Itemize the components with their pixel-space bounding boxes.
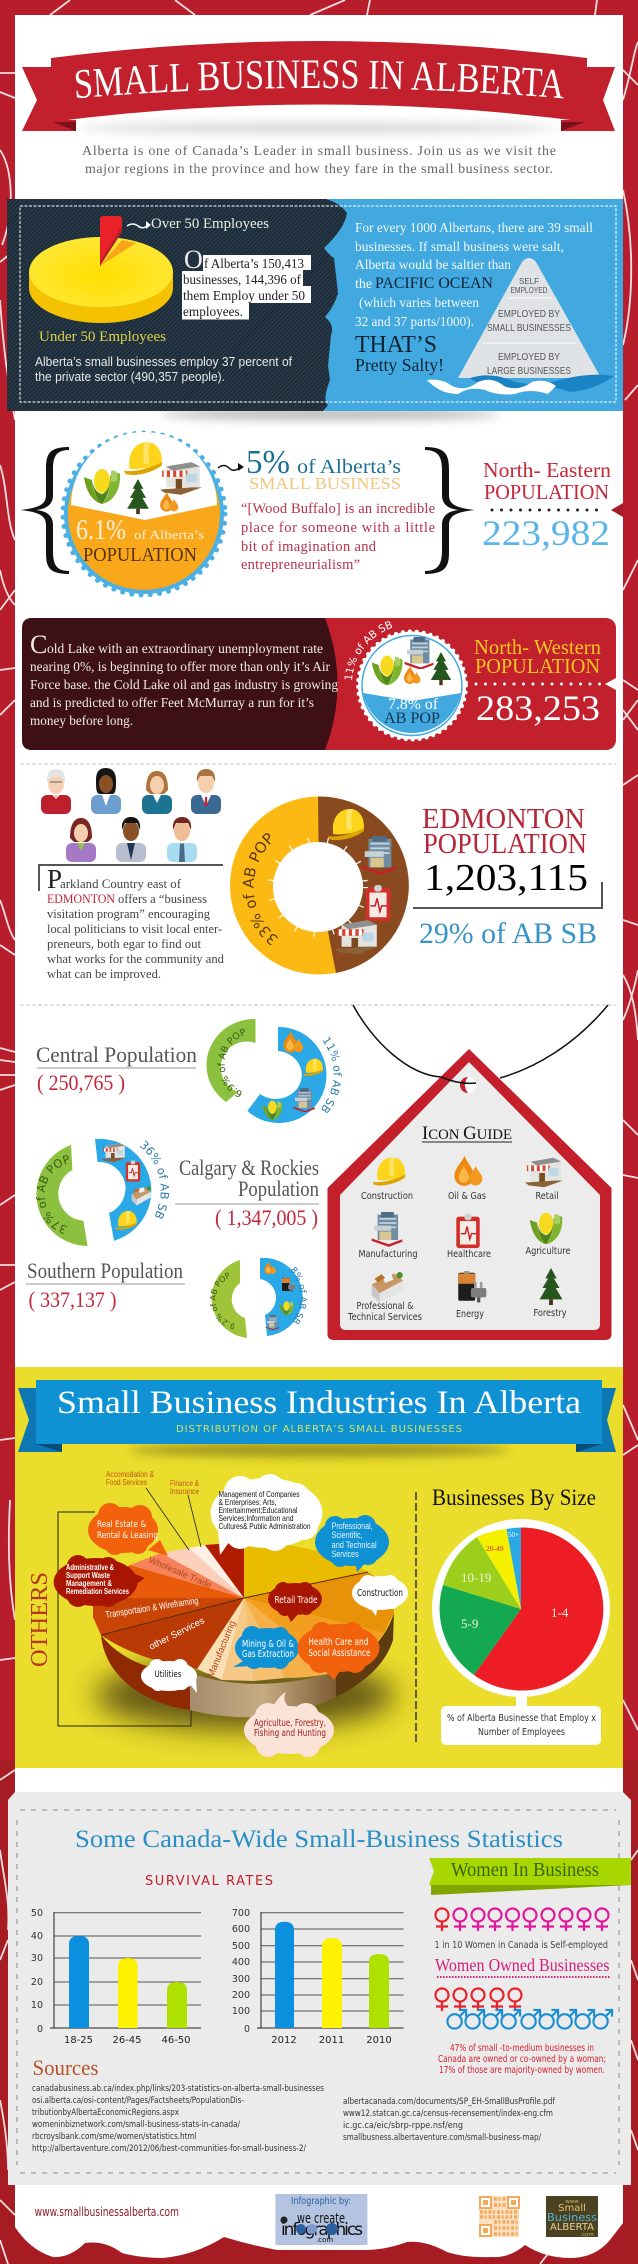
pie: businesses by size <box>432 1519 610 1697</box>
callout: businesses under 50: f Alberta’s 150,413 <box>204 256 304 271</box>
icon: factory <box>266 1315 279 1330</box>
cloud: professional <box>315 1515 389 1572</box>
text: ownership stats: 47% of small -to-medium businesses in <box>450 2043 594 2054</box>
donut: central: 6.9% of AB POP <box>217 1028 245 1097</box>
icon labels: Oil & Gas <box>448 1191 486 1202</box>
bar chart: survival by age: 18-25 <box>64 2035 93 2046</box>
panel: calgary and rockies <box>36 1138 319 1246</box>
sources: rbcroyslbank.com/sme/women/statistics.html <box>32 2132 196 2142</box>
cloud: agriculture <box>244 1692 334 1757</box>
sources: Sources <box>32 2055 98 2080</box>
sources: osi.alberta.ca/osi-content/Pages/Factsheets/PopulationDis- <box>32 2096 244 2106</box>
icon: tree <box>431 652 451 685</box>
sources: http://albertaventure.com/2012/06/best-communities-for-small-business-2/ <box>32 2144 307 2154</box>
cloud: administrative: Management & <box>66 1579 112 1588</box>
text: pacific ocean comparison: businesses. If small business were salt, <box>355 240 564 255</box>
title: SMALL BUSINESS IN ALBERTA <box>76 60 564 98</box>
people group <box>41 768 221 862</box>
icon: factory <box>293 1088 315 1113</box>
footer <box>35 2194 598 2245</box>
pie: industries <box>93 1542 395 1730</box>
sources: ic.gc.ca/eic/sbrp-rppe.nsf/eng <box>343 2121 463 2131</box>
sources: canadabusiness.ab.ca/index.php/links/203-statistics-on-alberta-small-businesses <box>32 2084 324 2094</box>
icon: forestry <box>540 1268 562 1305</box>
text: cold lake: old Lake with an extraordinary unemployment rate <box>47 641 323 656</box>
stat: 5 percent of small business: of Alberta’s <box>297 456 401 478</box>
leader lines <box>146 1488 201 1550</box>
cloud: mining: Mining & Oil & <box>242 1639 294 1650</box>
icon: hard hat <box>124 442 162 475</box>
bar chart: survival by age: 20 <box>31 1977 43 1988</box>
text: cold lake: and is predicted to offer Feet McMurray a run for it’s <box>30 695 314 710</box>
qr code <box>479 2196 519 2237</box>
icon: tree <box>127 479 149 514</box>
icon: professional <box>132 1186 151 1205</box>
text: cold lake: Force base. the Cold Lake oil and gas industry is growing <box>30 677 338 692</box>
bar chart: survival by year: 100 <box>232 2006 250 2017</box>
bar chart: survival by age <box>31 1908 201 2046</box>
badge: north-western share: 11% of AB SB <box>344 621 392 680</box>
text: pacific ocean comparison: the <box>355 277 372 292</box>
credit box <box>275 2194 367 2245</box>
cloud: retail trade: Retail Trade <box>274 1595 318 1606</box>
donut: southern: 9.2% of AB POP <box>210 1272 235 1330</box>
text: cold lake: money before long. <box>30 713 133 728</box>
credit box: .com <box>316 2236 333 2244</box>
pie: businesses by size: 50+ <box>508 1531 519 1539</box>
banner: women in business <box>429 1858 631 1895</box>
pie: businesses by size: 10-19 <box>461 1570 491 1585</box>
bar chart: survival by age: 40 <box>31 1931 43 1942</box>
cloud: construction <box>352 1575 408 1616</box>
cloud: construction: Construction <box>357 1588 403 1599</box>
stat: 5 percent of small business: SMALL BUSINESS <box>249 474 401 493</box>
cloud: professional: and Technical <box>332 1540 377 1550</box>
cloud: professional: Professional, <box>332 1521 373 1531</box>
logo: ALBERTA <box>550 2222 594 2233</box>
credit box: infographics <box>281 2220 363 2240</box>
panel: icon guide tag <box>328 1005 612 1340</box>
heading: calgary population: ( 1,347,005 ) <box>215 1205 318 1230</box>
footer white cloud <box>15 2180 623 2258</box>
icon: store <box>160 462 202 495</box>
banner: women in business: Women In Business <box>451 1859 599 1881</box>
cloud: administrative: Remediation Services <box>66 1587 129 1596</box>
icon: healthcare <box>456 1214 480 1248</box>
icon: healthcare <box>366 885 390 921</box>
pyramid: salt iceberg: EMPLOYED BY <box>498 352 560 363</box>
cloud: health care: Social Assistance <box>308 1648 371 1659</box>
bar chart: survival by year: 200 <box>232 1990 250 2001</box>
heading: north-western population: North- Western <box>474 635 601 659</box>
label: transportation: Transportaion & Wireframing <box>105 1595 199 1621</box>
heading: edmonton population: POPULATION <box>423 829 587 860</box>
icon: corn <box>84 469 120 504</box>
icon: professional services <box>372 1272 403 1303</box>
heading: north-eastern population: POPULATION <box>484 480 609 504</box>
icon labels: Construction <box>361 1191 413 1202</box>
text: pacific ocean comparison: Pretty Salty! <box>355 355 444 375</box>
cloud: real estate: Rental & Leasing <box>97 1531 158 1541</box>
left brace <box>20 447 69 574</box>
caption <box>441 1695 601 1745</box>
icon: energy <box>458 1271 486 1302</box>
heading: icon guide: ICON GUIDE <box>422 1123 512 1144</box>
panel: small business industries <box>15 1367 623 1768</box>
cloud: administrative: Support Waste <box>66 1571 110 1580</box>
website: www.smallbusinessalberta.com <box>35 2204 179 2219</box>
panel: central population: ( 250,765 ) <box>37 1070 125 1095</box>
cloud: professional: Scientific, <box>332 1530 363 1540</box>
title ribbon <box>22 41 615 137</box>
icon labels: Agriculture <box>526 1246 570 1257</box>
white page panel <box>15 15 623 1792</box>
cloud: real estate <box>88 1503 168 1556</box>
heading: edmonton population: 1,203,115 <box>424 857 588 899</box>
text: parkland county: P <box>47 864 62 894</box>
cloud: professional: Services <box>332 1549 359 1559</box>
heading: Some Canada-Wide Small-Business Statistics <box>75 1826 563 1853</box>
icon: oil <box>160 492 178 512</box>
icons: 1 in 10 women <box>436 1908 608 1931</box>
icon: retail <box>525 1158 563 1187</box>
text: ownership stats <box>438 2043 606 2076</box>
badge: population share: 6.1% <box>76 515 126 546</box>
icon labels: Healthcare <box>447 1249 491 1260</box>
cloud: management: Cultures& Public Administration <box>218 1521 311 1531</box>
text: pacific ocean comparison: THAT’S <box>355 332 437 358</box>
icon: hard hat <box>303 1059 323 1076</box>
text: parkland county: offers a “business <box>118 891 207 906</box>
logo: Small <box>558 2203 586 2214</box>
donut: calgary <box>36 1138 170 1246</box>
icon labels <box>347 1191 570 1323</box>
label: accommodation: Food Services <box>106 1477 147 1487</box>
heading: edmonton population: EDMONTON <box>422 804 585 835</box>
cloud: management: & Enterprises; Arts, <box>218 1497 276 1507</box>
stat: 5 percent of small business <box>246 444 401 493</box>
pie: businesses by size: 20-49 <box>486 1544 504 1553</box>
icon: healthcare <box>126 1161 140 1181</box>
icon labels: Manufacturing <box>358 1249 418 1260</box>
label: others: OTHERS <box>27 1572 53 1667</box>
heading: calgary population: Calgary & Rockies <box>179 1155 319 1180</box>
heading: north-western population: 283,253 <box>476 688 600 728</box>
icon: agriculture <box>530 1213 562 1244</box>
label: other services: other Services <box>147 1615 207 1653</box>
donut: central: 11% of AB SB <box>322 1036 342 1113</box>
cloud: agriculture: Fishing and Hunting <box>254 1728 326 1739</box>
cloud: mining <box>233 1626 299 1669</box>
heading: women owned businesses: Women Owned Businesses <box>435 1955 610 1975</box>
cloud: agriculture: Agricultue, Forestry, <box>254 1718 326 1729</box>
icon: store <box>335 920 379 954</box>
credit box: we create <box>297 2211 345 2227</box>
icons: women and men owners <box>436 1988 612 2029</box>
label: manufacturing: Manufacturing <box>206 1619 238 1679</box>
sources: www12.statcan.gc.ca/census-recensement/index-eng.cfm <box>343 2109 553 2119</box>
icon: oil and gas <box>454 1156 482 1186</box>
bracket <box>39 865 223 891</box>
badge: north-western share <box>344 621 468 742</box>
intro text: Alberta is one of Canada’s Leader in small business. Join us as we visit the <box>82 144 556 159</box>
icon: manufacturing <box>362 836 396 875</box>
logo <box>546 2196 598 2238</box>
heading: survival rates: SURVIVAL RATES <box>145 1874 273 1889</box>
sources: womeninbiznetwork.com/small-business-stats-in-canada/ <box>32 2120 241 2130</box>
pyramid: salt iceberg: SELF <box>519 277 539 286</box>
icon labels: Professional & <box>356 1301 414 1312</box>
icon: oil <box>264 1262 276 1274</box>
icon: factory <box>405 637 433 670</box>
text: parkland county <box>47 864 224 981</box>
bar chart: survival by year: 2011 <box>319 2035 344 2046</box>
pyramid: salt iceberg: LARGE BUSINESSES <box>487 366 571 377</box>
heading: north-western population <box>474 635 616 728</box>
donut: edmonton share: 33% of AB POP <box>242 833 278 946</box>
panel: southern population: Southern Population <box>27 1258 183 1283</box>
logo: www <box>565 2199 579 2205</box>
bracket: others <box>58 1512 191 1726</box>
caption: % of Alberta Businesse that Employ x <box>447 1713 596 1724</box>
cloud: retail trade <box>268 1582 322 1622</box>
quote: place for someone with a little <box>241 520 435 536</box>
badge: population share <box>63 432 225 595</box>
bar chart: survival by year <box>232 1908 404 2046</box>
bar chart: survival by year: 700 <box>232 1908 250 1919</box>
heading: edmonton population: 29% of AB SB <box>419 917 597 950</box>
pie: employee share <box>29 216 173 323</box>
cloud: administrative: Administrative & <box>66 1563 114 1572</box>
label: accommodation <box>106 1469 154 1487</box>
callout: businesses under 50: businesses, 144,396 of <box>183 272 301 287</box>
icon: corn <box>372 656 403 685</box>
icon labels: Forestry <box>534 1308 567 1319</box>
sources <box>32 2055 556 2154</box>
text: pacific ocean comparison: Alberta would be saltier than <box>355 258 511 273</box>
panel: central population <box>36 1019 342 1123</box>
text: pacific ocean comparison <box>355 221 593 375</box>
logo: .com <box>580 2232 594 2238</box>
donut: calgary: 36% of AB SB <box>140 1140 170 1219</box>
callout: businesses under 50: them Employ under 50 <box>183 288 305 303</box>
credit box: Infographic by: <box>291 2196 351 2207</box>
panel: north-western <box>22 618 616 750</box>
text: parkland county: arkland Country east of <box>60 876 182 891</box>
icon labels: Technical Services <box>347 1312 422 1323</box>
pyramid: salt iceberg: SMALL BUSINESSES <box>487 323 571 334</box>
badge: population share: POPULATION <box>83 544 197 566</box>
string <box>353 1005 608 1083</box>
bar chart: survival by year: 600 <box>232 1924 250 1935</box>
intro text <box>82 144 556 177</box>
icon: manufacturing <box>372 1212 402 1247</box>
icon: construction <box>373 1158 405 1186</box>
donut: southern: 8% of AB SB <box>291 1267 307 1324</box>
panel: size and salt <box>7 199 623 420</box>
text: cold lake: C <box>30 630 47 659</box>
quote: “[Wood Buffalo] is an incredible <box>241 501 435 517</box>
label: over 50 employees: Over 50 Employees <box>151 216 269 232</box>
icon: corn <box>263 1101 282 1120</box>
cloud: management: Entertainment;Educational <box>218 1505 298 1515</box>
badge: population share: of Alberta’s <box>134 527 204 542</box>
heading: north-western population: POPULATION <box>475 654 600 678</box>
icon: hard hat <box>328 809 364 840</box>
heading: Small Business Industries In Alberta <box>57 1385 581 1421</box>
donut: edmonton share <box>230 796 409 974</box>
cloud: administrative <box>54 1555 145 1607</box>
cloud: health care <box>298 1622 380 1680</box>
label: accommodation: Accomodation & <box>106 1469 154 1479</box>
pyramid: salt iceberg <box>427 258 614 394</box>
panel: southern population: ( 337,137 ) <box>28 1287 116 1312</box>
panel: north-eastern <box>20 432 623 595</box>
heading: north-eastern population <box>482 458 623 553</box>
bar chart: survival by year: 2012 <box>271 2035 297 2046</box>
arrow <box>218 463 244 471</box>
icon: hard hat <box>115 1211 137 1230</box>
text: share of private sector: Alberta’s small businesses employ 37 percent of <box>35 354 292 369</box>
cloud: real estate: Real Estate & <box>97 1520 146 1530</box>
bar chart: survival by age: 50 <box>31 1908 43 1919</box>
icon: energy <box>282 1277 295 1292</box>
sources: tributionbyAlbertaEconomicRegions.aspx <box>32 2108 180 2118</box>
bar chart: survival by year: 500 <box>232 1941 250 1952</box>
badge: north-western share: 7.8% of <box>388 696 439 713</box>
bar chart: survival by age: 26-45 <box>112 2035 142 2046</box>
pie: businesses by size: 5-9 <box>461 1616 478 1631</box>
panel: southern population <box>26 1258 307 1338</box>
panel: edmonton <box>38 768 603 981</box>
donut: southern <box>210 1258 307 1338</box>
intro text: major regions in the province and how they fare in the small business sector. <box>85 162 553 177</box>
quote: entrepreneurialism” <box>241 557 360 573</box>
banner <box>18 1380 616 1457</box>
heading: calgary population <box>175 1155 319 1230</box>
text: parkland county: visitation program” encouraging <box>47 906 210 921</box>
icon: oil <box>404 666 420 684</box>
label: finance: Finance & <box>170 1478 199 1488</box>
logo: Business <box>547 2211 597 2224</box>
icon labels: Retail <box>536 1191 558 1202</box>
quote <box>241 501 435 573</box>
text: parkland county: preneurs, both egar to find out <box>47 936 201 951</box>
pyramid: salt iceberg: EMPLOYED <box>510 285 548 295</box>
cloud: management: Services;Information and <box>218 1513 294 1523</box>
cloud: management <box>210 1474 322 1555</box>
donut: central <box>206 1019 342 1123</box>
cloud: utilities: Utilities <box>154 1670 182 1680</box>
text: pacific ocean comparison: PACIFIC OCEAN <box>375 275 493 292</box>
text: pacific ocean comparison: (which varies between <box>359 296 479 311</box>
bar chart: survival by age: 46-50 <box>161 2035 191 2046</box>
text: share of private sector <box>35 354 292 384</box>
title <box>76 60 564 98</box>
bar chart: survival by year: 2010 <box>366 2035 392 2046</box>
badge: north-western share: AB POP <box>384 710 440 727</box>
label: finance: Insurance <box>170 1486 199 1496</box>
bar chart: survival by age: 30 <box>31 1953 43 1964</box>
pyramid: salt iceberg: EMPLOYED BY <box>498 309 560 320</box>
sources: smallbusness.albertaventure.com/small-business-map/ <box>343 2133 542 2143</box>
callout: businesses under 50: employees. <box>183 304 243 319</box>
bar chart: survival by year: 400 <box>232 1957 250 1968</box>
text: pacific ocean comparison: For every 1000 Albertans, there are 39 small <box>355 221 593 236</box>
pie: businesses by size: 1-4 <box>551 1605 569 1620</box>
donut: calgary: 37% of AB POP <box>36 1155 69 1234</box>
bar chart: survival by age: 10 <box>31 2000 43 2011</box>
text: pacific ocean comparison: 32 and 37 parts/1000). <box>355 315 474 330</box>
panel: central population: Central Population <box>36 1042 197 1067</box>
caption: Number of Employees <box>478 1727 565 1738</box>
icon: store <box>102 1143 126 1162</box>
sources: albertacanada.com/documents/SP_EH-SmallBusProfile.pdf <box>343 2097 556 2107</box>
heading: north-eastern population: 223,982 <box>482 513 610 553</box>
bar chart: survival by year: 300 <box>232 1974 250 1985</box>
panel: canada-wide statistics <box>8 1792 631 2185</box>
cloud: management: Management of Companies <box>218 1489 300 1499</box>
text: parkland county: what can be improved. <box>47 966 161 981</box>
cloud: mining: Gas Extraction <box>242 1649 294 1660</box>
label: under 50 employees: Under 50 Employees <box>39 329 166 345</box>
icon: corn <box>279 1301 294 1315</box>
text: cold lake: nearing 0%, is beginning to offer more than only it’s Air <box>30 659 330 674</box>
heading: businesses by size: Businesses By Size <box>432 1485 596 1510</box>
text: cold lake <box>30 630 338 728</box>
right brace <box>425 447 475 574</box>
icon labels: Energy <box>456 1309 484 1320</box>
text: parkland county: EDMONTON <box>47 891 116 906</box>
subheading: DISTRIBUTION OF ALBERTA’S SMALL BUSINESSES <box>176 1424 462 1435</box>
heading: calgary population: Population <box>238 1176 319 1201</box>
stat: 5 percent of small business: 5% <box>246 444 290 481</box>
callout: businesses under 50: O <box>184 245 203 274</box>
heading: north-eastern population: North- Eastern <box>483 458 612 482</box>
heading: edmonton population <box>413 804 602 950</box>
text: self-employed: 1 in 10 Women in Canada is Self-employed <box>434 1940 608 1951</box>
callout: businesses under 50 <box>182 245 311 320</box>
cloud: health care: Health Care and <box>308 1637 368 1648</box>
bar chart: survival by age: 0 <box>37 2024 43 2035</box>
bar chart: survival by year: 0 <box>244 2024 250 2035</box>
text: share of private sector: the private sector (490,357 people). <box>35 369 225 384</box>
text: parkland county: what works for the community and <box>47 951 224 966</box>
label: finance <box>170 1478 199 1496</box>
label: wholesale: Wholesale Trade <box>147 1555 213 1590</box>
quote: bit of imagination and <box>241 539 377 555</box>
cloud: utilities <box>141 1659 197 1693</box>
icon: oil <box>283 1031 303 1052</box>
text: parkland county: local politicians to visit local enter- <box>47 921 222 936</box>
